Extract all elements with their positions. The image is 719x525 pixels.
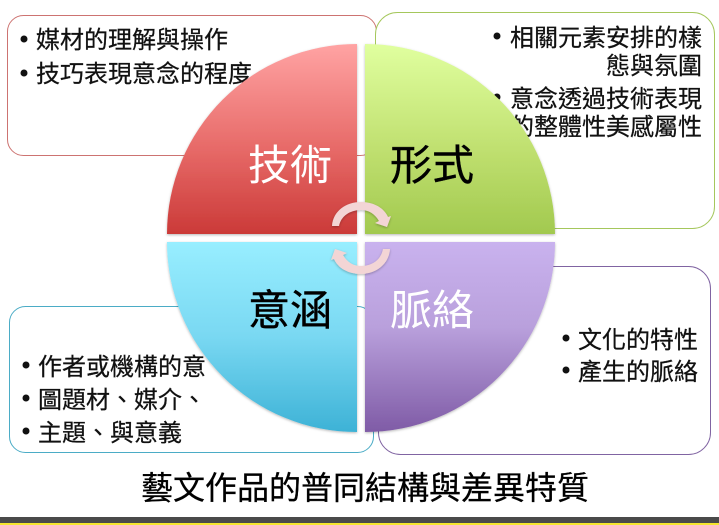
- bullet list: 技術: [20, 27, 252, 88]
- arrow: clockwise bottom: [331, 249, 390, 274]
- panel: 技術 description box: [8, 16, 376, 156]
- panel: 脈絡 description box: [378, 266, 710, 454]
- quadrant: 形式: [365, 44, 555, 234]
- arrow: clockwise top: [332, 202, 391, 227]
- bullet list: 技術: 媒材的理解與操作: [36, 27, 228, 54]
- bullet list: 形式: 的整體性美感屬性: [510, 114, 702, 141]
- panel: 形式 description box: [376, 12, 714, 228]
- bullet list: 意涵: 圖題材、媒介、: [38, 387, 206, 414]
- title: 藝文作品的普同結構與差異特質: [141, 470, 589, 506]
- bullet list: 脈絡: 文化的特性: [578, 327, 698, 354]
- bullet list: 意涵: 主題、與意義: [38, 420, 182, 447]
- bullet list: 形式: 態與氛圍: [606, 53, 702, 80]
- quadrant: 意涵: 意涵: [248, 287, 332, 334]
- bullet list: 意涵: 作者或機構的意: [38, 354, 206, 381]
- quadrant: 脈絡: [365, 242, 555, 432]
- bullet list: 形式: 相關元素安排的樣: [510, 25, 702, 52]
- footer bar: [0, 517, 719, 525]
- bullet list: 形式: 意念透過技術表現: [510, 86, 702, 113]
- quadrant: 意涵: [167, 242, 357, 432]
- bullet list: 脈絡: 產生的脈絡: [578, 359, 698, 386]
- quadrant: 技術: 技術: [248, 142, 332, 189]
- quadrant: 技術: [167, 44, 357, 234]
- quadrant: 形式: 形式: [390, 142, 474, 189]
- panel: 意涵 description box: [10, 306, 374, 452]
- bullet list: 意涵: [22, 354, 206, 447]
- bullet list: 脈絡: [562, 327, 698, 386]
- bullet list: 形式: [494, 25, 702, 141]
- bullet list: 技術: 技巧表現意念的程度: [36, 61, 252, 88]
- quadrant: 脈絡: 脈絡: [390, 287, 474, 334]
